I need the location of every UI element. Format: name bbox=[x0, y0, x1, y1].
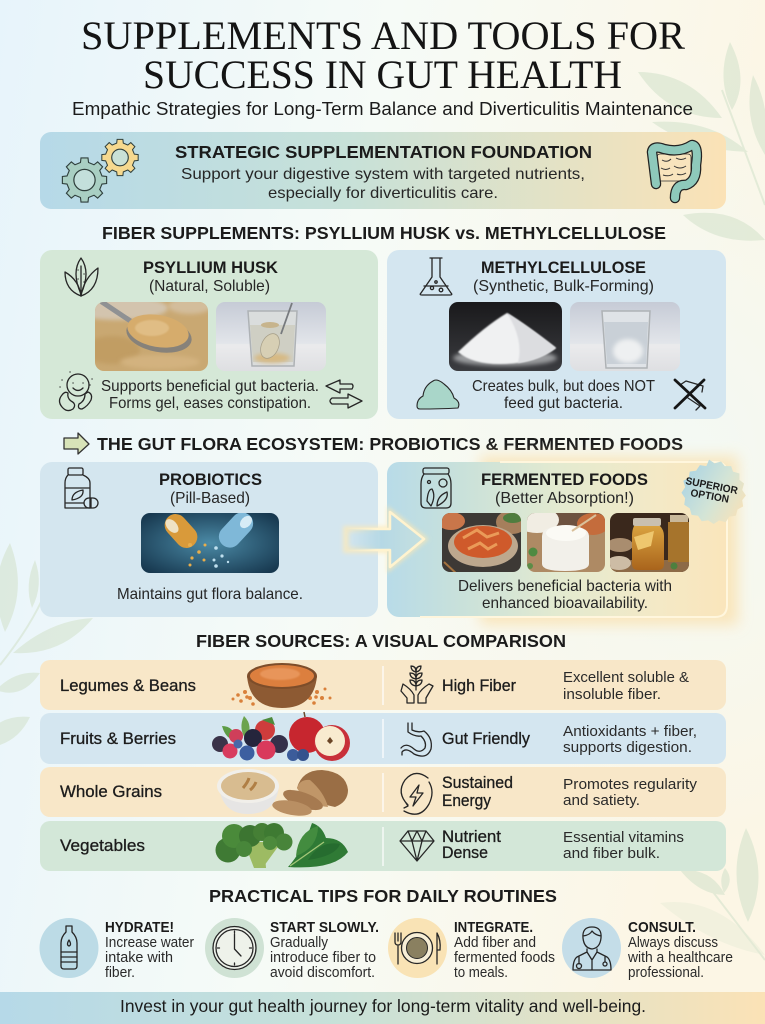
image: berries and apple bbox=[212, 712, 350, 761]
label: nutrient dense bbox=[442, 828, 501, 862]
heading: practical tips: PRACTICAL TIPS FOR DAILY ROUTINES bbox=[209, 886, 557, 906]
icon: powder bulk bbox=[417, 380, 459, 409]
text: methylcellulose note bbox=[472, 378, 655, 412]
text: hydrate tip: HYDRATE! bbox=[105, 920, 174, 936]
label: sustained energy bbox=[442, 774, 513, 810]
text: fruits description bbox=[563, 724, 697, 756]
text: fruits description: Antioxidants + fiber, bbox=[563, 724, 697, 740]
text: grains description bbox=[563, 777, 698, 809]
text: foundation description: Support your digestive system with targeted nutrients, bbox=[181, 166, 585, 183]
icon: flask bbox=[420, 258, 452, 295]
text: grains description: and satiety. bbox=[563, 793, 640, 809]
image: bowl of lentils bbox=[232, 663, 332, 708]
photo: white powder pile bbox=[449, 302, 562, 371]
photo: kimchi bbox=[442, 513, 521, 572]
text: hydrate tip bbox=[105, 920, 194, 981]
text: natural soluble: (Natural, Soluble) bbox=[149, 278, 270, 295]
text: consult tip: CONSULT. bbox=[628, 920, 696, 936]
text: probiotics note: Maintains gut flora balance. bbox=[117, 586, 303, 603]
panel: psyllium husk bbox=[40, 250, 378, 419]
icon: fermenting jar bbox=[421, 468, 451, 508]
icon: crossed out bacteria bbox=[675, 380, 705, 410]
icon: diamond bbox=[400, 831, 434, 861]
row: whole grains bbox=[40, 767, 726, 818]
text: fruits description: supports digestion. bbox=[563, 740, 692, 756]
text: synthetic bulk-forming: (Synthetic, Bulk-Forming) bbox=[473, 278, 654, 295]
text: grains description: Promotes regularity bbox=[563, 777, 698, 793]
heading: fiber supplements: FIBER SUPPLEMENTS: PSYLLIUM HUSK vs. METHYLCELLULOSE bbox=[102, 223, 666, 243]
title bbox=[81, 13, 685, 97]
badge: superior option bbox=[681, 460, 746, 524]
text: legumes description bbox=[563, 670, 689, 703]
panel: methylcellulose bbox=[387, 250, 726, 419]
text: start slowly tip: introduce fiber to bbox=[270, 950, 376, 966]
text: start slowly tip: avoid discomfort. bbox=[270, 965, 375, 981]
divider bbox=[382, 827, 384, 866]
icon: exchange arrows bbox=[326, 380, 362, 408]
divider bbox=[382, 773, 384, 812]
text: fermented note bbox=[458, 578, 672, 612]
icon: water bottle bbox=[40, 918, 98, 978]
icon: heading arrow bbox=[64, 433, 89, 454]
label: high fiber: High Fiber bbox=[442, 677, 517, 695]
text: hydrate tip: fiber. bbox=[105, 965, 135, 981]
title: SUPPLEMENTS AND TOOLS FOR bbox=[81, 13, 685, 58]
text: fermented note: enhanced bioavailability. bbox=[482, 595, 648, 612]
text: better absorption: (Better Absorption!) bbox=[495, 490, 634, 507]
icon: supplement bottle bbox=[65, 468, 98, 508]
label: nutrient dense: Nutrient bbox=[442, 828, 501, 846]
icon: gears bbox=[62, 139, 138, 202]
icon: clock bbox=[205, 918, 264, 978]
photo: kombucha bbox=[607, 513, 690, 572]
text: integrate tip bbox=[454, 920, 555, 981]
footer banner: Invest in your gut health journey for long-term vitality and well-being. bbox=[120, 996, 646, 1016]
text: psyllium benefits bbox=[101, 378, 319, 412]
text: consult tip: Always discuss bbox=[628, 935, 718, 951]
arrow: probiotics to fermented foods bbox=[346, 512, 424, 567]
icon: energy cycle bbox=[401, 773, 432, 814]
text: hydrate tip: Increase water bbox=[105, 935, 194, 951]
text: integrate tip: to meals. bbox=[454, 965, 508, 981]
text: integrate tip: fermented foods bbox=[454, 950, 555, 966]
text: start slowly tip: Gradually bbox=[270, 935, 329, 951]
icon: happy gut bacteria bbox=[60, 372, 92, 411]
divider bbox=[382, 666, 384, 705]
label: sustained energy: Energy bbox=[442, 792, 492, 810]
text: psyllium benefits: Supports beneficial gut bacteria. bbox=[101, 378, 319, 395]
text: hydrate tip: intake with bbox=[105, 950, 173, 966]
divider bbox=[382, 719, 384, 758]
heading: gut flora ecosystem: THE GUT FLORA ECOSYSTEM: PROBIOTICS & FERMENTED FOODS bbox=[97, 434, 683, 454]
footer banner bbox=[0, 992, 765, 1024]
icon: colon bbox=[652, 145, 697, 198]
row: vegetables bbox=[40, 821, 726, 871]
photo: methylcellulose in water bbox=[570, 302, 680, 371]
panel: strategic supplementation foundation bbox=[40, 132, 726, 209]
tip: start slowly bbox=[205, 918, 379, 981]
icon: stomach bbox=[401, 723, 431, 756]
text: start slowly tip bbox=[270, 920, 379, 981]
heading: fermented foods: FERMENTED FOODS bbox=[481, 470, 648, 489]
photo: open capsule bbox=[141, 508, 279, 573]
label: gut friendly: Gut Friendly bbox=[442, 730, 531, 748]
text: vegetables description bbox=[563, 830, 684, 862]
label: nutrient dense: Dense bbox=[442, 844, 488, 862]
text: integrate tip: Add fiber and bbox=[454, 935, 536, 951]
icon: doctor bbox=[562, 918, 621, 978]
text: consult tip: with a healthcare bbox=[627, 950, 733, 966]
label: vegetables: Vegetables bbox=[60, 837, 145, 855]
badge: superior option: SUPERIOR bbox=[684, 475, 739, 497]
photo: psyllium powder on spoon bbox=[95, 302, 208, 371]
heading: fiber sources: FIBER SOURCES: A VISUAL COMPARISON bbox=[196, 631, 566, 651]
label: fruits: Fruits & Berries bbox=[60, 730, 176, 748]
text: start slowly tip: START SLOWLY. bbox=[270, 920, 379, 936]
icon: psyllium plant bbox=[65, 258, 98, 296]
image: oatmeal and bread bbox=[217, 769, 348, 818]
photo: psyllium in water bbox=[216, 302, 326, 371]
text: consult tip: professional. bbox=[628, 965, 704, 981]
text: fermented note: Delivers beneficial bacteria with bbox=[458, 578, 672, 595]
tip: consult bbox=[562, 918, 733, 981]
badge: superior option: OPTION bbox=[689, 487, 730, 506]
icon: hands holding wheat bbox=[401, 666, 433, 703]
heading: strategic supplementation: STRATEGIC SUPPLEMENTATION FOUNDATION bbox=[175, 142, 592, 162]
photo: yogurt bbox=[527, 513, 605, 572]
text: vegetables description: Essential vitamins bbox=[563, 830, 684, 846]
text: foundation description bbox=[181, 166, 585, 202]
text: psyllium benefits: Forms gel, eases constipation. bbox=[109, 395, 311, 412]
text: vegetables description: and fiber bulk. bbox=[563, 846, 660, 862]
heading: psyllium husk: PSYLLIUM HUSK bbox=[143, 258, 279, 277]
text: consult tip bbox=[627, 920, 733, 981]
text: methylcellulose note: Creates bulk, but does NOT bbox=[472, 378, 655, 395]
text: legumes description: insoluble fiber. bbox=[563, 687, 661, 703]
label: sustained energy: Sustained bbox=[442, 774, 513, 792]
tip: hydrate bbox=[40, 918, 194, 981]
icon: plate with cutlery bbox=[388, 918, 447, 978]
panel: probiotics bbox=[40, 462, 378, 617]
title: SUCCESS IN GUT HEALTH bbox=[143, 52, 622, 97]
label: grains: Whole Grains bbox=[60, 783, 162, 801]
label: legumes: Legumes & Beans bbox=[60, 677, 196, 695]
text: integrate tip: INTEGRATE. bbox=[454, 920, 533, 936]
heading: probiotics: PROBIOTICS bbox=[159, 470, 262, 489]
tip: integrate bbox=[388, 918, 555, 981]
text: pill-based: (Pill-Based) bbox=[170, 490, 250, 507]
row: legumes and beans bbox=[40, 660, 726, 710]
panel: fermented foods bbox=[387, 456, 746, 625]
text: methylcellulose note: feed gut bacteria. bbox=[504, 395, 623, 412]
text: legumes description: Excellent soluble & bbox=[563, 670, 689, 686]
row: fruits and berries bbox=[40, 712, 726, 764]
text: foundation description: especially for diverticulitis care. bbox=[268, 185, 498, 202]
subtitle: Empathic Strategies for Long-Term Balance and Diverticulitis Maintenance bbox=[72, 98, 693, 119]
heading: methylcellulose: METHYLCELLULOSE bbox=[481, 258, 646, 277]
image: broccoli and spinach bbox=[216, 823, 348, 868]
